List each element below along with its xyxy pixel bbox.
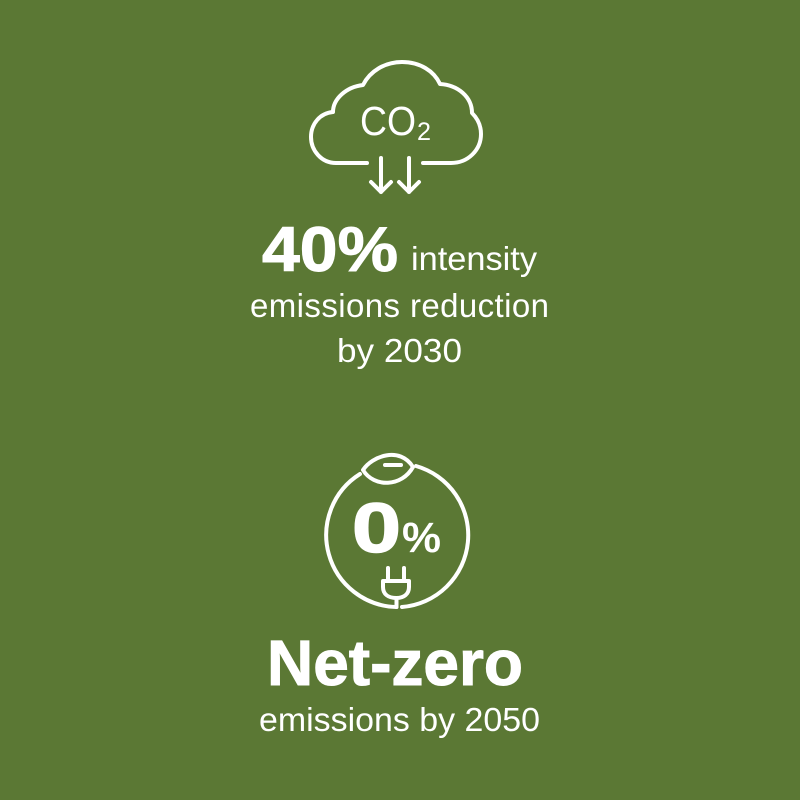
heading: Net-zero: Net-zero: [267, 627, 523, 699]
heading: 40%: 40%: [262, 215, 398, 285]
CO2 subscript: 2: [417, 118, 431, 146]
text: intensity: intensity: [411, 240, 538, 277]
0% label percent: %: [402, 514, 441, 562]
text: by 2030: by 2030: [337, 332, 462, 369]
icon: CO2 cloud with down arrows: [311, 62, 481, 192]
text: emissions reduction: emissions reduction: [250, 287, 549, 324]
CO2 label: CO: [360, 98, 416, 144]
0% label zero: 0: [352, 489, 401, 567]
text: emissions by 2050: emissions by 2050: [259, 701, 540, 738]
icon: net-zero circle with leaf and plug: [326, 455, 468, 607]
